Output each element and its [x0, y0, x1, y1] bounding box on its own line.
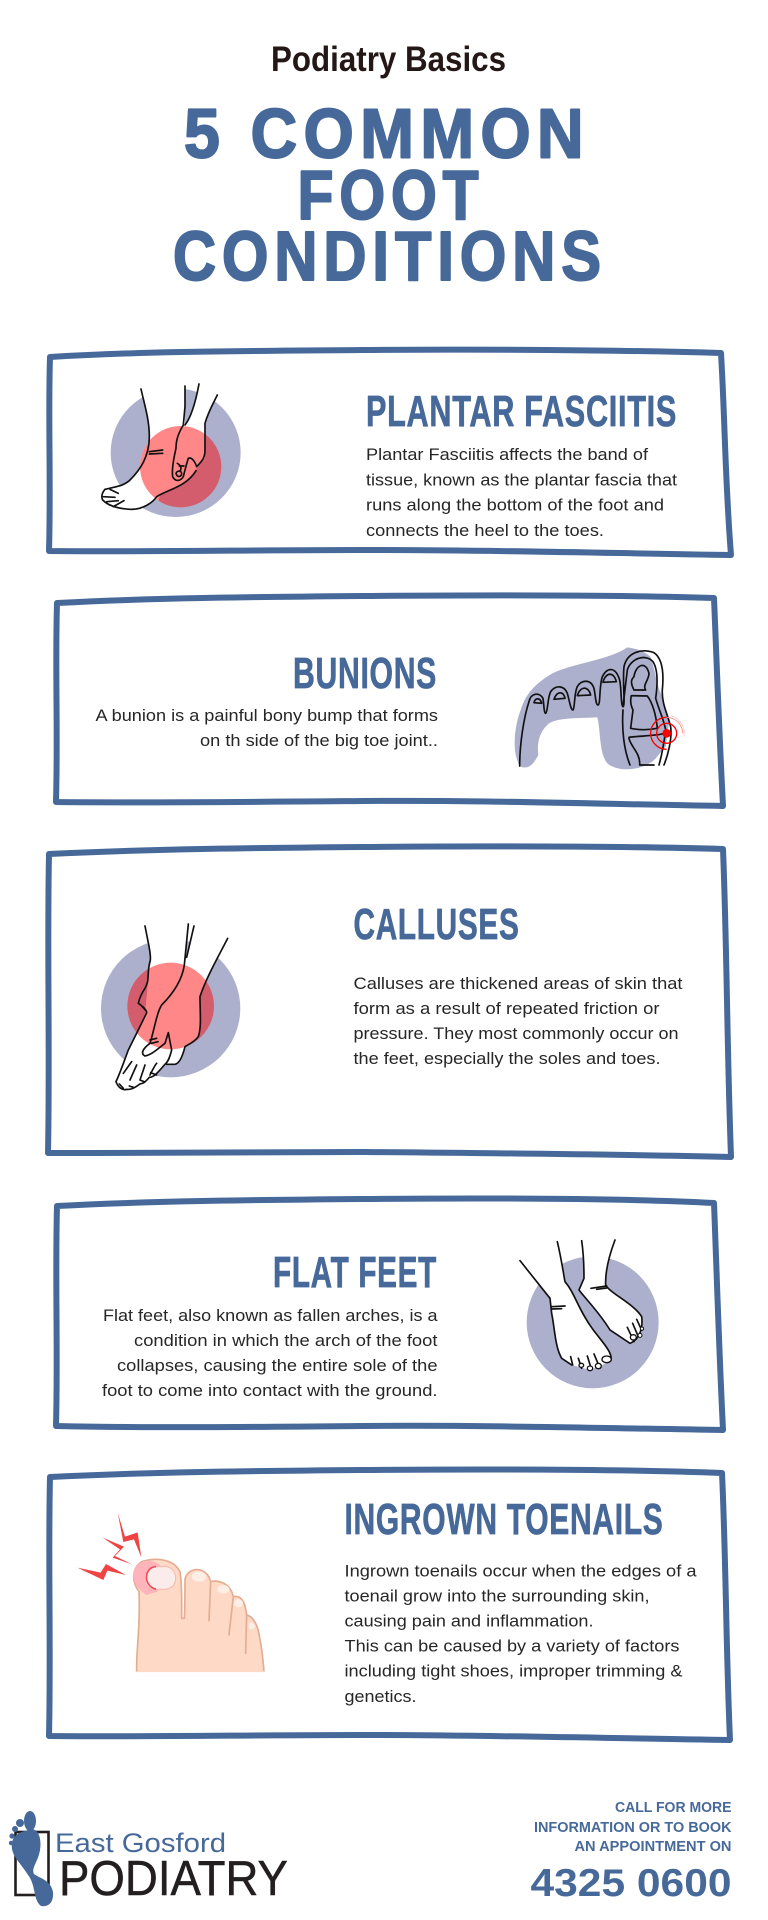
- body text: [354, 974, 683, 1068]
- icon: feet with hand: [101, 924, 240, 1091]
- contact text: INFORMATION OR TO BOOK: [534, 1820, 732, 1836]
- contact call to action: [530, 1800, 732, 1905]
- body text: [344, 1562, 697, 1706]
- phone number: 4325 0600: [530, 1862, 732, 1905]
- contact text: AN APPOINTMENT ON: [574, 1839, 732, 1855]
- body text: form as a result of repeated friction or: [354, 999, 660, 1018]
- body text: foot to come into contact with the ground.: [102, 1381, 438, 1400]
- icon: two feet: [520, 1240, 659, 1388]
- body text: pressure. They most commonly occur on: [354, 1024, 678, 1043]
- logo: East Gosford Podiatry: [9, 1811, 288, 1906]
- body text: causing pain and inflammation.: [344, 1612, 594, 1630]
- main title: FOOT: [298, 156, 484, 234]
- body text: connects the heel to the toes.: [366, 521, 604, 540]
- heading: FLAT FEET: [273, 1249, 437, 1297]
- header: title block: [173, 40, 607, 295]
- icon: ingrown toe: [77, 1513, 264, 1672]
- body text: tissue, known as the plantar fascia that: [366, 470, 677, 490]
- main title: [173, 95, 607, 295]
- body text: runs along the bottom of the foot and: [366, 496, 664, 514]
- body text: [102, 1306, 438, 1400]
- logo: East Gosford Podiatry: PODIATRY: [59, 1852, 288, 1906]
- body text: on th side of the big toe joint..: [200, 731, 438, 750]
- body text: condition in which the arch of the foot: [134, 1331, 438, 1350]
- body text: collapses, causing the entire sole of the: [117, 1356, 438, 1375]
- body text: [96, 706, 438, 750]
- logo footprint: [9, 1811, 53, 1906]
- panel: calluses: [48, 846, 731, 1157]
- body text: including tight shoes, improper trimming &: [344, 1662, 683, 1680]
- body text: toenail grow into the surrounding skin,: [344, 1586, 650, 1606]
- main title: 5 COMMON: [184, 95, 590, 173]
- heading: CALLUSES: [354, 901, 520, 949]
- body text: This can be caused by a variety of factors: [344, 1636, 680, 1656]
- logo wordmark: East Gosford: [55, 1828, 226, 1858]
- body text: Ingrown toenails occur when the edges of a: [344, 1562, 697, 1580]
- contact text: CALL FOR MORE: [615, 1800, 732, 1816]
- body text: A bunion is a painful bony bump that forms: [96, 706, 438, 725]
- icon: foot held by hand: [102, 384, 241, 517]
- body text: Calluses are thickened areas of skin that: [354, 974, 683, 993]
- panel: bunions: [56, 595, 723, 806]
- body text: [366, 445, 677, 540]
- main title: CONDITIONS: [173, 217, 607, 295]
- body text: Plantar Fasciitis affects the band of: [366, 445, 648, 464]
- panel: plantar fasciitis: [49, 350, 731, 555]
- heading: BUNIONS: [293, 650, 437, 698]
- subtitle: Podiatry Basics: [271, 40, 506, 79]
- icon: bunion x-ray: [515, 647, 684, 769]
- panel: ingrown toenails: [49, 1469, 730, 1740]
- contact text: [534, 1800, 732, 1855]
- body text: Flat feet, also known as fallen arches, is a: [103, 1306, 438, 1325]
- panel: flat feet: [56, 1198, 723, 1430]
- logo frame: [16, 1832, 48, 1895]
- body text: genetics.: [344, 1687, 416, 1706]
- body text: the feet, especially the soles and toes.: [354, 1049, 660, 1068]
